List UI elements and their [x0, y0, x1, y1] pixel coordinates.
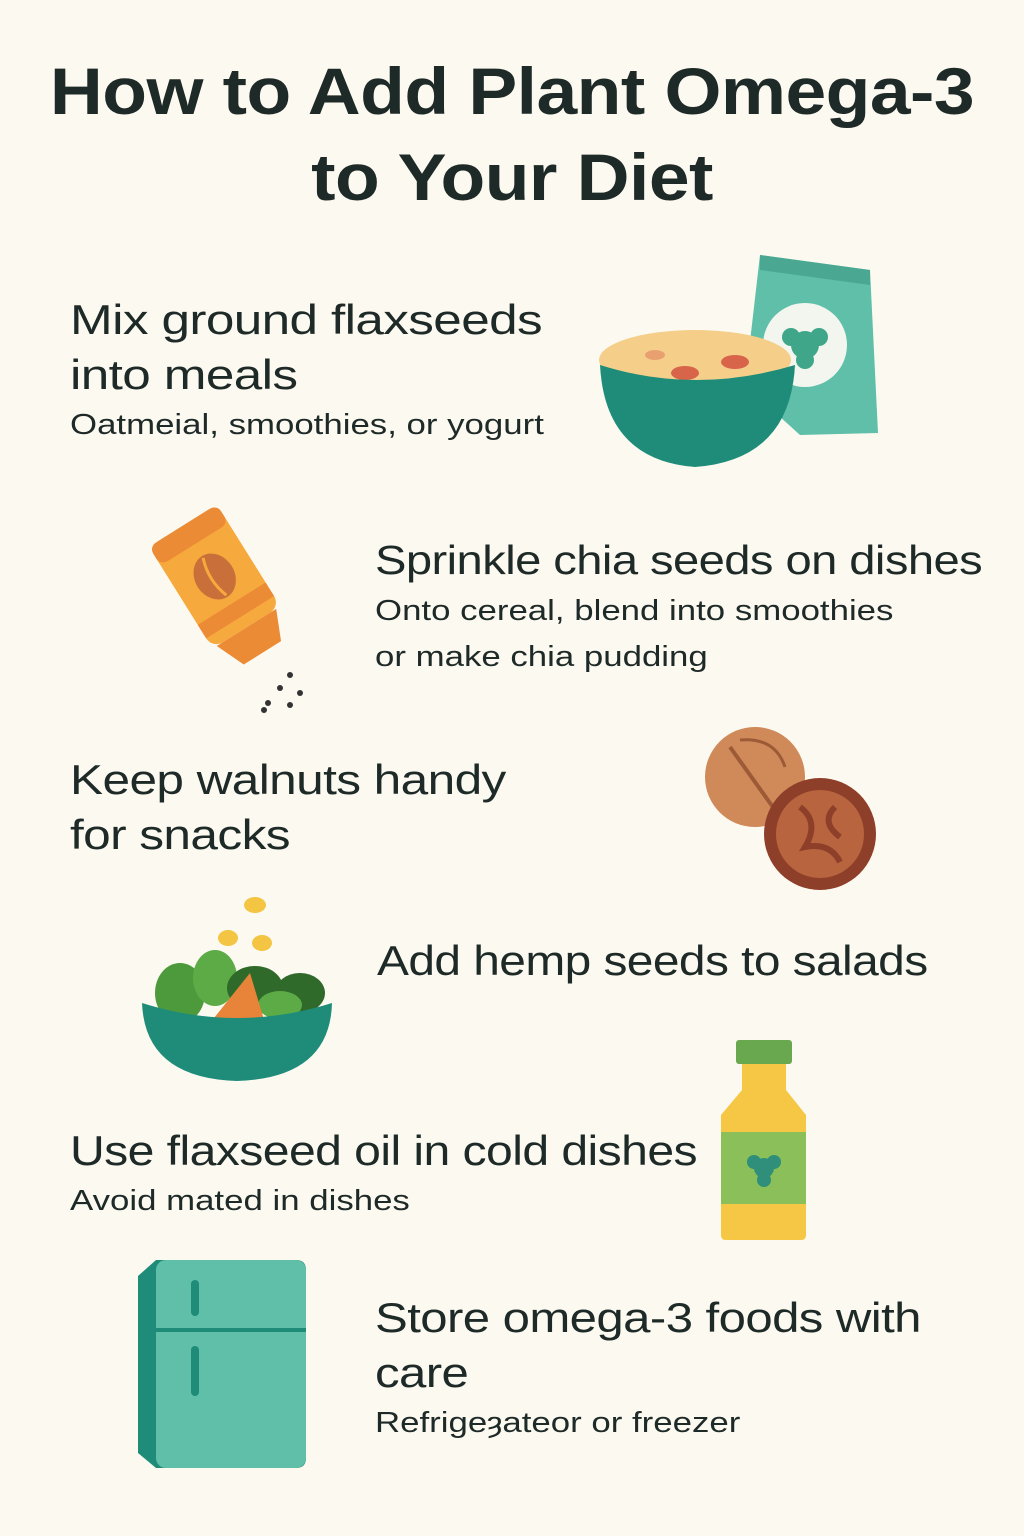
text: storage [375, 1294, 921, 1439]
title: to Your Diet [311, 140, 713, 214]
text: chia: Sprinkle chia seeds on dishes [375, 537, 982, 583]
icon: fridge [138, 1260, 306, 1468]
text: chia: or make chia pudding [375, 641, 708, 673]
text: flaxseeds: Mix ground flaxseeds [70, 296, 542, 343]
text: flaxseed oil: Use flaxseed oil in cold dishes [70, 1127, 697, 1174]
text: chia [375, 537, 982, 673]
text: walnuts [70, 756, 506, 858]
title: How to Add Plant Omega-3 [50, 54, 974, 128]
text: walnuts: for snacks [70, 811, 290, 858]
icon: walnuts [705, 727, 876, 890]
text: flaxseeds: into meals [70, 351, 297, 398]
text: flaxseed oil: Avoid mated in dishes [70, 1185, 410, 1217]
icon: salad bowl [142, 897, 332, 1081]
text: flaxseeds [70, 296, 544, 441]
text: storage: Store omega-3 foods with [375, 1294, 921, 1341]
text: hemp: Add hemp seeds to salads [377, 937, 928, 984]
text: flaxseeds: Oatmeial, smoothies, or yogurt [70, 409, 544, 441]
icon: oil bottle [721, 1040, 806, 1240]
text: chia: Onto cereal, blend into smoothies [375, 595, 893, 627]
text: flaxseed oil [70, 1127, 697, 1217]
text: storage: care [375, 1349, 468, 1396]
text: walnuts: Keep walnuts handy [70, 756, 506, 803]
icon: bowl and bag [599, 255, 878, 467]
icon: chia shaker [152, 508, 303, 713]
title [50, 54, 974, 214]
text: storage: Refrigeȝateor or freezer [375, 1407, 740, 1439]
